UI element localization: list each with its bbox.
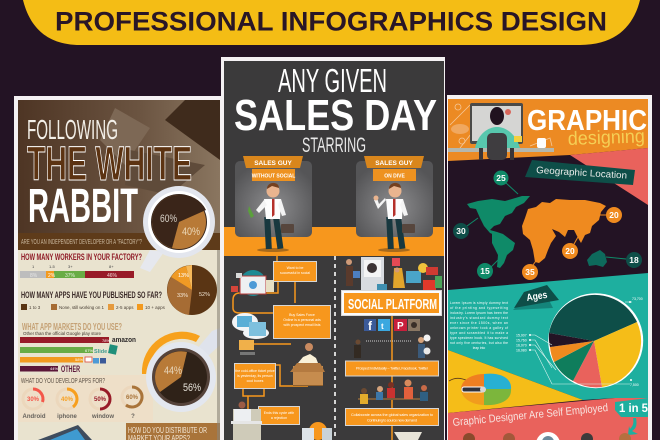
pie labels and leader lines: 15,760 (516, 338, 527, 342)
donut: other: ? (131, 414, 135, 420)
donut: iphone (57, 389, 77, 420)
callout box 1: successful in social (280, 271, 310, 275)
donut: window (90, 389, 114, 420)
heading: any given: ANY GIVEN (278, 62, 387, 99)
legend: apps (21, 304, 166, 310)
pie chart: apps published: 13% (178, 273, 189, 279)
donut: other: 60% (126, 395, 139, 401)
body paragraph: leap into (473, 346, 485, 350)
card: without social (235, 156, 312, 237)
pie labels and leader lines: 16,080 (516, 348, 527, 352)
pie labels and leader lines: 16,070 (516, 344, 527, 348)
geographic location banner (525, 160, 635, 185)
callout box 2: with prospect email lists (284, 323, 321, 327)
map markers: 25 (496, 173, 506, 183)
callout box 1 (274, 262, 316, 282)
orange header (448, 99, 648, 161)
map: north america (467, 196, 530, 236)
pie labels and leader lines: 7,500 (630, 383, 639, 387)
platform section background (18, 375, 153, 422)
map: eurasia and africa (522, 199, 606, 263)
heading: workers: HOW MANY WORKERS IN YOUR FACTORY? (21, 252, 142, 262)
ages banner: Ages (526, 290, 549, 304)
pie labels and leader lines: 15,007 (516, 334, 527, 338)
coffee cup: 60 40 (140, 186, 215, 272)
heading: graphic: GRAPHIC (527, 105, 647, 137)
callout box 4: Ends this cycle with (264, 411, 294, 415)
geographic location banner: Geographic Location (536, 165, 627, 182)
subheading: app markets: Other than the official Google play store (23, 331, 101, 336)
one in five tag: 1 in 5 (619, 401, 648, 415)
body paragraph: not only five centuries, but also the (450, 341, 508, 345)
callout: prospect: Prospect Individually – Twitter, Facebook, Twitter (356, 366, 429, 370)
callout box 3 (234, 364, 276, 388)
heading: starring: STARRING (302, 134, 366, 157)
team meeting illustration (358, 380, 428, 404)
bar chart: app markets: Slide (94, 349, 107, 355)
callout box 4: a rejection (271, 416, 287, 420)
icon: cardboard box (290, 343, 325, 386)
coffee cup: 44 56: 44% (164, 365, 182, 377)
salmon section (448, 398, 648, 440)
heading: app markets: WHAT APP MARKETS DO YOU USE? (22, 322, 122, 333)
panel: sales day infographic (221, 57, 445, 440)
icon: charts (302, 422, 332, 440)
people exchanging messages (354, 334, 430, 358)
designer at desk illustration (447, 103, 554, 160)
map markers: 15 (480, 266, 490, 276)
coffee cup: 60 40: 60% (160, 213, 177, 225)
question band (18, 233, 220, 250)
stacked bar: workers: 1 (32, 264, 35, 269)
body paragraph: type and scrambled it to make a (450, 331, 508, 335)
callout: collaborate: Continuing to source new demand (367, 418, 417, 422)
map markers: 30 (456, 226, 466, 236)
panel: white rabbit infographic (14, 96, 224, 440)
stacked bar: workers: 37% (65, 273, 76, 279)
card: on dive: ON DIVE (384, 174, 405, 180)
body paragraph: industry's standard dummy text (450, 316, 508, 320)
bar chart: app markets: 67% (85, 348, 93, 353)
callout box 2: Buy Sales Force (289, 313, 315, 317)
body paragraph: type specimen book. It has survived (450, 336, 508, 340)
stacked bar: workers: 2% (48, 273, 56, 279)
callout box 3: cool boxes (247, 379, 264, 383)
callout box 2 (274, 306, 330, 338)
donut: android (22, 389, 46, 420)
figure: sales guy on dive (374, 183, 415, 252)
pie chart: apps published (167, 265, 217, 315)
donut: android: Android (22, 414, 46, 420)
legend: apps: 2-5 apps (116, 305, 134, 310)
map markers: 20 (565, 246, 575, 256)
stacked bar: workers: 8% (30, 273, 38, 279)
map markers: 35 (525, 267, 535, 277)
stacked bar: workers: 46% (107, 273, 118, 279)
question band: ARE YOU AN INDEPENDENT DEVELOPER OR A "FACTORY"? (21, 239, 142, 246)
heading: develop apps: WHAT DO YOU DEVELOP APPS FOR? (21, 378, 105, 385)
coffee cup: 60 40: 40% (182, 226, 200, 238)
flow connectors (233, 256, 392, 440)
people row (463, 432, 631, 440)
donut: iphone: iphone (57, 414, 77, 420)
callout: prospect (346, 361, 438, 376)
heading: the white: THE WHITE (27, 138, 192, 191)
map markers: 20 (609, 210, 619, 220)
social media icons: f (368, 319, 373, 333)
title banner (23, 0, 640, 45)
social platform heading box (341, 290, 442, 316)
bar chart: app markets: amazon (112, 337, 136, 344)
callout: collaborate (346, 408, 438, 426)
icon: laptop at foot (394, 432, 422, 440)
map: south america (492, 233, 515, 268)
panel edge shadow (217, 250, 220, 440)
figure: desk worker (231, 402, 262, 440)
stacked bar: workers: 3+ (68, 264, 73, 269)
stacked bar: workers: 8+ (109, 264, 114, 269)
bar chart: app markets (20, 337, 136, 374)
body paragraph (450, 301, 508, 350)
teal ages section (448, 273, 648, 400)
pie chart: apps published: 52% (199, 292, 210, 298)
figure: sales guy without social (248, 183, 294, 252)
world map (467, 196, 607, 268)
callout box 1: Want to be (287, 266, 303, 270)
heading: following: FOLLOWING (27, 114, 118, 145)
question box: distribute: HOW DO YOU DISTRIBUTE OR (128, 426, 207, 435)
orange floor band (224, 227, 444, 256)
callout: collaborate: Collaborate across the global sales organization to (351, 413, 433, 417)
question box: distribute (126, 423, 220, 440)
body paragraph: industry. Lorem Ipsum has been the (450, 311, 508, 315)
bar chart: app markets: 44% (50, 366, 58, 371)
card: without social: SALES GUY (254, 160, 292, 167)
yellow section (448, 350, 583, 413)
pie chart: ages (548, 293, 643, 388)
coffee cup: 44 56: 56% (183, 382, 201, 394)
heading: apps published: HOW MANY APPS HAVE YOU PUBLISHED SO FAR? (21, 290, 162, 300)
bar chart: app markets: OTHER (61, 364, 80, 374)
pie labels and leader lines (516, 297, 643, 387)
donut: iphone: 40% (61, 397, 74, 403)
salmon triangle (570, 148, 648, 205)
coffee cup: 44 56 (142, 328, 220, 412)
callout box 4 (258, 406, 300, 424)
card: on dive (356, 156, 433, 237)
map: australia (587, 250, 607, 267)
icon: infographic mouse (449, 374, 511, 405)
social media icons: P (397, 321, 404, 332)
header photo (18, 100, 220, 234)
body paragraph: Lorem Ipsum is simply dummy text (450, 301, 508, 305)
map markers (453, 170, 642, 280)
ages banner (513, 285, 559, 310)
card: on dive: SALES GUY (375, 160, 413, 167)
title banner: PROFESSIONAL INFOGRAPHICS DESIGN (55, 6, 607, 36)
body paragraph: ever since the 1500s, when an (450, 321, 508, 325)
donut: other (122, 387, 142, 420)
map markers: 18 (629, 255, 639, 265)
stacked bar: workers (20, 266, 134, 278)
heading: sales day: SALES DAY (234, 91, 437, 140)
card: without social: WITHOUT SOCIAL (252, 174, 295, 180)
one in five tag (615, 398, 648, 435)
legend: apps: None, still working on 1 (59, 305, 104, 310)
heading: designing: designing (567, 126, 645, 150)
heading: rabbit: RABBIT (28, 180, 138, 233)
body paragraph: of the printing and typesetting (450, 306, 508, 310)
stacked bar: workers: 1-5 (49, 264, 56, 269)
callout box 2: Online is a personal ads (283, 318, 321, 322)
legend: apps: 1 to 3 (29, 305, 41, 310)
pie labels and leader lines: 73,700 (632, 297, 643, 301)
donut: window: 50% (94, 397, 107, 403)
social platform illustration (346, 257, 442, 294)
social media icons: t (381, 322, 384, 331)
callout box 3: is yesterday, its person (237, 374, 273, 378)
icon: laptop cluster (231, 270, 274, 296)
bar chart: app markets: 58% (75, 357, 83, 362)
panel: graphic designing infographic (447, 95, 652, 440)
social media icons (364, 319, 420, 333)
dashed divider (334, 256, 336, 440)
pie chart: apps published: 33% (177, 293, 188, 299)
bar chart: app markets: 78% (102, 338, 110, 343)
heading: self employed: Graphic Designer Are Self Employed (452, 402, 609, 429)
callout box 3: the cold-office ticket price (235, 369, 275, 373)
icon: tablet (38, 425, 92, 440)
donut: window: window (91, 414, 114, 420)
icon: email clouds (232, 313, 269, 355)
body paragraph: unknown printer took a galley of (450, 326, 508, 330)
donut: android: 30% (27, 397, 40, 403)
social platform heading box: SOCIAL PLATFORM (348, 296, 437, 313)
legend: apps: 10 + apps (145, 305, 166, 310)
